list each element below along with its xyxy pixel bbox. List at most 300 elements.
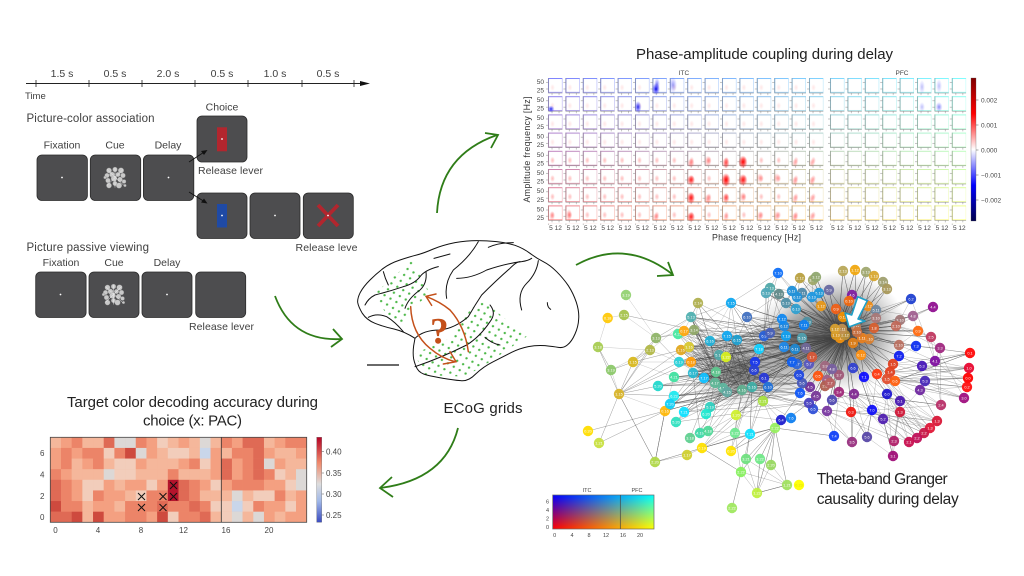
- network nodes: 5.9: [826, 288, 832, 292]
- network nodes: 2.11: [838, 327, 846, 331]
- network nodes: 7.2: [896, 354, 902, 358]
- network nodes: 7.6: [788, 416, 794, 420]
- network nodes: 0.12: [857, 353, 865, 357]
- network color legend: 0: [546, 525, 549, 531]
- y tick labels: 25: [537, 215, 544, 222]
- network nodes: 3.14: [690, 328, 698, 332]
- timeline axis: 1.5 s: [51, 68, 73, 80]
- network nodes: 1.22: [753, 491, 761, 495]
- task row: passive viewing: [36, 257, 255, 333]
- network nodes: 1.15: [629, 360, 637, 364]
- network nodes: 4.4: [851, 392, 857, 396]
- network nodes: 7.21: [746, 432, 754, 436]
- network nodes: 3.13: [862, 270, 870, 274]
- network nodes: 4.4: [930, 305, 936, 309]
- caption: [817, 471, 959, 508]
- network nodes: 1.12: [817, 304, 825, 308]
- y tick labels: 25: [537, 178, 544, 186]
- caption: causality during delay: [817, 491, 959, 508]
- network nodes: 1.13: [870, 274, 878, 278]
- task row: picture-color association: Release leve: [296, 242, 358, 254]
- network nodes: 6.10: [764, 385, 772, 389]
- network nodes: 6.6: [850, 366, 856, 370]
- arrow: brain to network: [576, 253, 673, 276]
- network nodes: 0.17: [680, 329, 688, 333]
- colorbar: [317, 437, 342, 522]
- brain outline: [358, 241, 579, 381]
- network nodes: 4.3: [917, 388, 923, 392]
- network nodes: 7.6: [797, 391, 803, 395]
- network nodes: 5.11: [872, 308, 880, 312]
- network color legend: 12: [603, 533, 609, 539]
- arrow: task to brain: [275, 296, 342, 347]
- network nodes: 3.14: [879, 280, 887, 284]
- network nodes: 3.0: [961, 396, 967, 400]
- x tick labels: 5 12: [601, 225, 614, 232]
- network nodes: 0.11: [839, 315, 847, 319]
- arrows with question mark: [411, 294, 468, 364]
- network color legend: 20: [637, 533, 643, 539]
- network nodes: 1.3: [897, 410, 903, 414]
- network nodes: 1.16: [685, 345, 693, 349]
- network nodes: 2.12: [796, 276, 804, 280]
- x tick labels: 5 12: [793, 225, 806, 232]
- network nodes: 1.17: [683, 453, 691, 457]
- title: [67, 394, 318, 430]
- network nodes: 4.18: [712, 370, 720, 374]
- network nodes: 1.3: [927, 426, 933, 430]
- axis tick labels: 4: [96, 526, 101, 535]
- network nodes: 0.9: [915, 329, 921, 333]
- network color legend: 4: [570, 533, 574, 539]
- axis tick labels: 8: [139, 526, 144, 535]
- network nodes: 1.16: [677, 348, 685, 352]
- timeline axis: 0.5 s: [104, 68, 126, 80]
- axis tick labels: 0: [40, 513, 45, 522]
- network nodes: 3.22: [756, 457, 764, 461]
- x tick labels: 5 12: [936, 225, 949, 232]
- network nodes: 6.17: [689, 371, 697, 375]
- arrow: brain to PAC: [437, 133, 498, 213]
- network nodes: 5.3: [863, 303, 869, 307]
- network nodes: 4.5: [824, 409, 830, 413]
- network nodes: 0.9: [833, 307, 839, 311]
- y tick labels: [537, 79, 544, 222]
- axis tick labels: 0: [53, 526, 58, 535]
- axis tick labels: [40, 449, 274, 535]
- network nodes: 5.1: [897, 399, 903, 403]
- x tick labels: 5 12: [654, 225, 667, 232]
- network color legend: 8: [587, 533, 591, 539]
- colorbar: 0.40: [326, 448, 342, 456]
- network nodes: 3.18: [686, 436, 694, 440]
- axis tick labels: 4: [40, 470, 45, 480]
- network nodes: 6.11: [780, 345, 788, 349]
- network nodes: 2.13: [646, 348, 654, 352]
- network nodes: 2.4: [938, 403, 944, 407]
- axis labels: Phase frequency [Hz]: [712, 232, 801, 242]
- axis tick labels: 16: [222, 526, 231, 535]
- x tick labels: 5 12: [723, 225, 736, 232]
- y tick labels: 25: [537, 124, 544, 131]
- x tick labels: 5 12: [953, 225, 966, 232]
- colorbar: 0.000: [981, 148, 998, 154]
- network nodes: 6.13: [808, 295, 816, 299]
- network nodes: 5.6: [829, 398, 835, 402]
- network nodes: 7.17: [700, 376, 708, 380]
- axis labels: [522, 96, 801, 242]
- network nodes: 0.11: [836, 336, 844, 340]
- network nodes: 4.8: [829, 367, 835, 371]
- network nodes: 1.12: [851, 268, 859, 272]
- network nodes: 3.10: [872, 316, 880, 320]
- network nodes: 1.3: [934, 419, 940, 423]
- network nodes: 5.11: [798, 291, 806, 295]
- network nodes: 6.11: [788, 289, 796, 293]
- network nodes: 3.1: [890, 454, 896, 458]
- x tick labels: 5 12: [918, 225, 931, 232]
- task row: passive viewing: Delay: [154, 257, 181, 269]
- arrows with question mark: ?: [430, 311, 449, 352]
- panel: Granger causality network: [546, 265, 975, 539]
- timeline axis: 2.0 s: [157, 68, 179, 80]
- network nodes: 6.13: [815, 291, 823, 295]
- network nodes: 6.1: [761, 376, 767, 380]
- network nodes: 7.3: [913, 344, 919, 348]
- network nodes: 0.2: [964, 385, 970, 389]
- network nodes: 4.16: [719, 386, 727, 390]
- y tick labels: 25: [537, 142, 544, 149]
- network nodes: 5.13: [762, 291, 770, 295]
- axis labels: Amplitude frequency [Hz]: [522, 96, 532, 202]
- y tick labels: 50: [537, 188, 544, 195]
- network nodes: 4.8: [910, 314, 916, 318]
- network nodes: 6.7: [794, 362, 800, 366]
- colorbar: −0.002: [981, 198, 1001, 204]
- colorbar: 0.35: [326, 469, 342, 478]
- x tick labels: 5 12: [584, 225, 597, 232]
- timeline axis: 1.0 s: [264, 68, 286, 80]
- colorbar: 0.002: [981, 98, 998, 104]
- network nodes: 7.1: [861, 375, 867, 379]
- region labels: [679, 70, 909, 77]
- network nodes: 0.5: [815, 374, 821, 378]
- label: ECoG grids: ECoG grids: [444, 400, 522, 417]
- network nodes: 1.0: [966, 366, 972, 370]
- scale bar: [367, 364, 399, 366]
- network nodes: 4.5: [807, 385, 813, 389]
- network color legend: 16: [620, 533, 626, 539]
- x tick labels: 5 12: [866, 225, 879, 232]
- network nodes: 0.12: [864, 304, 872, 308]
- y tick labels: 50: [537, 134, 544, 140]
- network color legend: ITC: [583, 488, 591, 494]
- network nodes: 7.10: [774, 271, 782, 275]
- arrow: highlighted hub: [845, 297, 867, 327]
- network nodes: 5.3: [919, 364, 925, 368]
- network nodes: 6.9: [761, 334, 767, 338]
- axis tick labels: 20: [265, 526, 274, 535]
- x tick labels: 5 12: [775, 225, 788, 232]
- network nodes: 4.1: [932, 359, 938, 363]
- y tick labels: 50: [537, 79, 544, 86]
- task row: passive viewing: Cue: [104, 257, 124, 269]
- x tick labels: 5 12: [706, 225, 719, 232]
- network nodes: 6.16: [706, 339, 714, 343]
- network nodes: 7.15: [723, 334, 731, 338]
- network nodes: 2.10: [853, 330, 861, 334]
- network nodes: 2.13: [839, 269, 847, 273]
- network nodes: 2.3: [891, 439, 897, 443]
- network nodes: 2.20: [767, 463, 775, 467]
- network nodes: 5.3: [922, 379, 928, 383]
- PAC markers: [138, 482, 177, 511]
- heading: picture-color association: Picture-color association: [26, 113, 154, 125]
- network nodes: 1.21: [595, 441, 603, 445]
- network nodes: 2.2: [921, 431, 927, 435]
- x tick labels: 5 12: [849, 225, 862, 232]
- colorbar: −0.001: [981, 172, 1001, 180]
- network color legend: 0: [553, 533, 556, 539]
- network nodes: 5.13: [687, 315, 695, 319]
- ECoG electrodes: [377, 261, 527, 377]
- x tick labels: [549, 225, 966, 232]
- x tick labels: 5 12: [619, 225, 632, 232]
- network nodes: 4.19: [696, 431, 704, 435]
- network nodes: 5.7: [806, 362, 812, 366]
- network nodes: 1.9: [850, 341, 856, 345]
- network nodes: 3.18: [594, 345, 602, 349]
- heatmap: [50, 437, 307, 523]
- network nodes: 7.7: [789, 360, 795, 364]
- panel: phase-amplitude coupling: [522, 46, 1001, 242]
- network nodes: 6.11: [791, 347, 799, 351]
- network nodes: 3.7: [836, 373, 842, 377]
- colorbar: 0.30: [326, 490, 342, 499]
- network nodes: 1.21: [783, 483, 791, 487]
- axis tick labels: 6: [40, 449, 45, 458]
- x tick labels: 5 12: [810, 225, 823, 232]
- region labels: ITC: [679, 70, 690, 77]
- network nodes: 5.20: [654, 384, 662, 388]
- network nodes: 7.0: [869, 408, 875, 412]
- network nodes: 3.22: [731, 431, 739, 435]
- network nodes: 5.20: [672, 420, 680, 424]
- x tick labels: 5 12: [831, 225, 844, 232]
- timeline axis: [25, 68, 370, 102]
- network nodes: 6.19: [675, 360, 683, 364]
- task row: picture-color association: [37, 102, 358, 254]
- network nodes: 6.6: [751, 368, 757, 372]
- x tick labels: 5 12: [549, 225, 562, 232]
- network nodes: 7.4: [831, 434, 837, 438]
- network nodes: 6.12: [780, 324, 788, 328]
- network nodes: 2.15: [620, 313, 628, 317]
- colorbar: [971, 78, 1001, 221]
- network nodes: 5.6: [799, 381, 805, 385]
- network nodes: 4.21: [670, 375, 678, 379]
- network nodes: 6.22: [670, 394, 678, 398]
- network nodes: 3.11: [852, 325, 860, 329]
- network nodes: 2.22: [771, 426, 779, 430]
- network nodes: 5.13: [766, 286, 774, 290]
- network nodes: 1.15: [615, 392, 623, 396]
- timeline axis: 0.5 s: [317, 68, 339, 80]
- x tick labels: 5 12: [741, 225, 754, 232]
- network nodes: 1.11: [858, 336, 866, 340]
- network nodes: 1.8: [871, 326, 877, 330]
- network color legend: 2: [546, 517, 549, 523]
- coupling blobs: [548, 77, 942, 222]
- network nodes: 6.5: [810, 407, 816, 411]
- task row: picture-color association: Cue: [105, 140, 125, 152]
- network nodes: 2.12: [841, 333, 849, 337]
- network nodes: 0.18: [687, 360, 695, 364]
- subplot frames: [540, 78, 970, 225]
- region labels: PFC: [896, 70, 909, 77]
- network nodes: 6.15: [733, 338, 741, 342]
- network nodes: 6.20: [702, 412, 710, 416]
- network nodes: 1.13: [832, 333, 840, 337]
- network nodes: 0.20: [584, 429, 592, 433]
- network nodes: 3.19: [607, 368, 615, 372]
- title: Phase-amplitude coupling during delay: [636, 46, 894, 63]
- network nodes: 2.10: [892, 324, 900, 328]
- x tick labels: 5 12: [758, 225, 771, 232]
- network nodes: 2.10: [895, 343, 903, 347]
- network nodes: 3.13: [883, 287, 891, 291]
- network nodes: 0.19: [698, 446, 706, 450]
- network nodes: 2.22: [728, 506, 736, 510]
- network nodes: 5.16: [748, 385, 756, 389]
- network nodes: 5.13: [782, 301, 790, 305]
- network nodes: 0.16: [661, 409, 669, 413]
- network nodes: 3.13: [652, 336, 660, 340]
- network nodes: 3.3: [937, 346, 943, 350]
- y tick labels: 50: [537, 206, 544, 214]
- network nodes: 0.23: [795, 483, 803, 487]
- caption: Theta-band Granger: [817, 471, 948, 488]
- network nodes: 5.14: [715, 353, 723, 357]
- network nodes: [583, 265, 975, 513]
- axis tick labels: 12: [179, 526, 188, 535]
- network nodes: 4.13: [775, 292, 783, 296]
- network nodes: 3.12: [812, 275, 820, 279]
- network nodes: 2.1: [906, 440, 912, 444]
- task row: passive viewing: Fixation: [43, 257, 80, 269]
- network nodes: 2.2: [914, 436, 920, 440]
- colorbar: 0.25: [326, 511, 342, 520]
- x tick labels: 5 12: [636, 225, 649, 232]
- network nodes: 6.0: [884, 392, 890, 396]
- network nodes: 7.11: [800, 323, 808, 327]
- y tick labels: 50: [537, 152, 544, 159]
- network nodes: 3.12: [809, 278, 817, 282]
- network nodes: 4.22: [674, 332, 682, 336]
- network nodes: 0.10: [845, 299, 853, 303]
- timeline axis: Time: [25, 91, 46, 102]
- network nodes: 4.15: [723, 390, 731, 394]
- network nodes: 6.12: [793, 295, 801, 299]
- network color legend: 4: [546, 508, 549, 514]
- x tick labels: 5 12: [567, 225, 580, 232]
- y tick labels: 25: [537, 160, 544, 168]
- colorbar: 0.001: [981, 122, 998, 130]
- network nodes: 5.13: [803, 320, 811, 324]
- network nodes: 1.20: [732, 413, 740, 417]
- network nodes: 6.5: [796, 373, 802, 377]
- x tick labels: 5 12: [901, 225, 914, 232]
- network nodes: 2.5: [928, 335, 934, 339]
- network nodes: 3.5: [849, 440, 855, 444]
- network nodes: 2.14: [694, 301, 702, 305]
- task row: passive viewing: Release lever: [189, 321, 254, 333]
- network nodes: 0.18: [604, 316, 611, 320]
- panel: target color decoding heatmap: [40, 394, 342, 535]
- network nodes: 7.20: [666, 402, 674, 406]
- network nodes: 6.4: [778, 418, 784, 422]
- axis tick labels: 2: [40, 492, 45, 501]
- network nodes: 2.22: [737, 470, 745, 474]
- y tick labels: 50: [537, 115, 544, 122]
- panel: brain with ECoG grids: [358, 241, 579, 381]
- network nodes: 1.5: [890, 362, 896, 366]
- y tick labels: 50: [537, 97, 544, 104]
- heading: picture passive viewing: Picture passive viewing: [26, 242, 149, 254]
- task row: picture-color association: Choice: [206, 102, 239, 114]
- network nodes: 6.10: [743, 315, 751, 319]
- panel: task timeline and conditions: [25, 68, 370, 333]
- network nodes: 0.0: [965, 376, 971, 380]
- task row: picture-color association: Delay: [155, 140, 182, 152]
- network nodes: 3.19: [622, 293, 630, 297]
- network nodes: 1.22: [722, 355, 730, 359]
- y tick labels: 25: [537, 106, 544, 113]
- network nodes: 3.9: [824, 378, 830, 382]
- y tick labels: 50: [537, 170, 544, 177]
- network nodes: 4.6: [849, 293, 855, 297]
- network nodes: 6.2: [908, 297, 914, 301]
- network nodes: 4.5: [813, 394, 819, 398]
- network nodes: 7.21: [680, 410, 688, 414]
- network nodes: 1.4: [887, 370, 893, 374]
- x tick labels: 5 12: [671, 225, 684, 232]
- network nodes: 5.2: [880, 417, 886, 421]
- network nodes: 4.16: [738, 388, 746, 392]
- network nodes: 2.20: [651, 460, 659, 464]
- network color legend: [546, 488, 654, 539]
- x tick labels: 5 12: [883, 225, 896, 232]
- network nodes: 1.12: [831, 327, 839, 331]
- network nodes: 0.6: [892, 379, 898, 383]
- network nodes: 0.3: [848, 410, 854, 414]
- network nodes: 0.1: [967, 351, 973, 355]
- title: choice (x: PAC): [143, 412, 242, 430]
- timeline axis: 0.5 s: [211, 68, 233, 80]
- network nodes: 5.5: [806, 401, 812, 405]
- task row: picture-color association: Fixation: [44, 140, 81, 152]
- network nodes: 7.15: [727, 301, 735, 305]
- network nodes: 7.5: [752, 360, 758, 364]
- network nodes: 2.21: [759, 399, 767, 403]
- network nodes: 6.13: [792, 307, 800, 311]
- network nodes: 1.7: [809, 355, 815, 359]
- network nodes: 2.7: [827, 381, 833, 385]
- y tick labels: 25: [537, 88, 544, 94]
- network nodes: 3.10: [896, 318, 904, 322]
- network nodes: 3.21: [742, 457, 750, 461]
- network color legend: 6: [546, 500, 549, 506]
